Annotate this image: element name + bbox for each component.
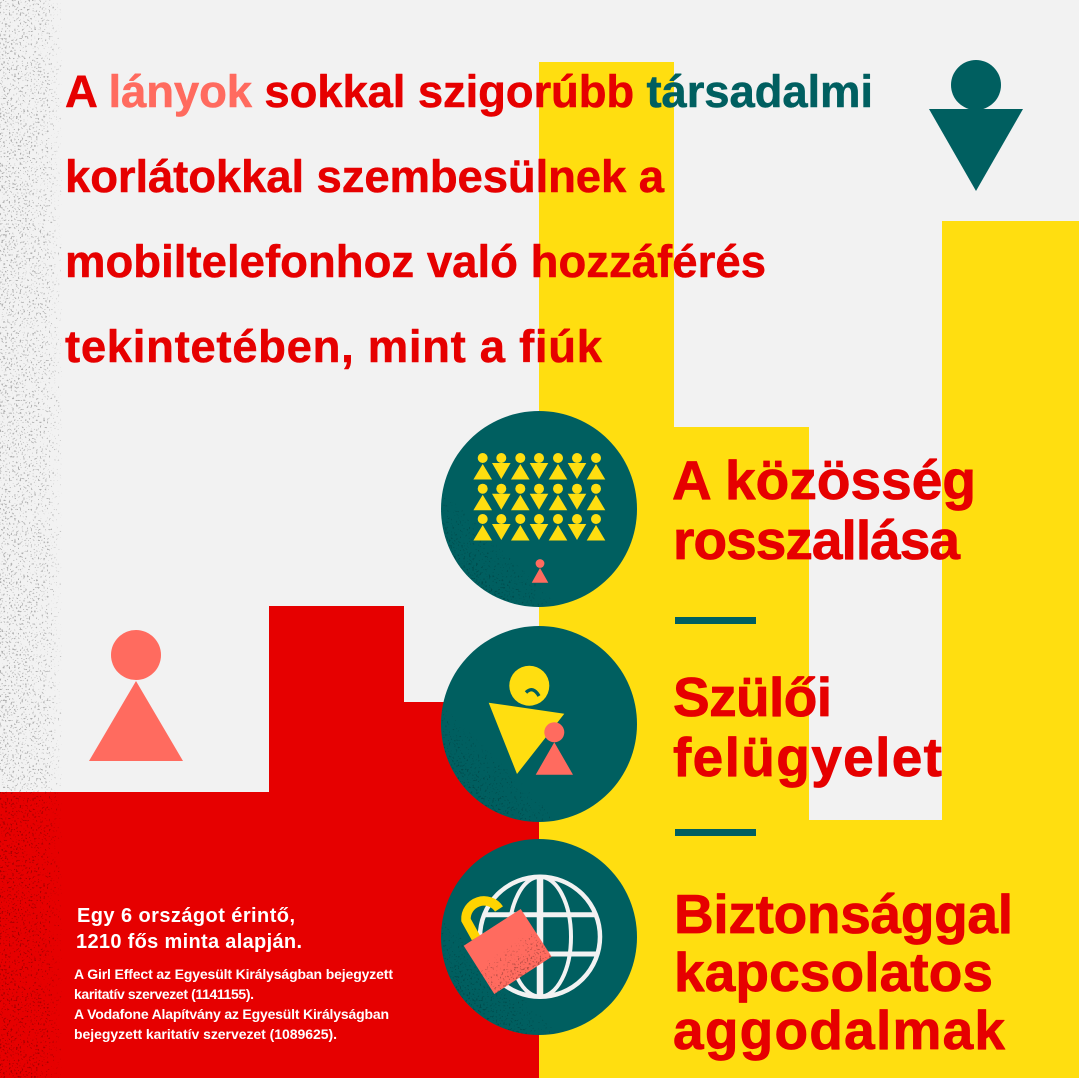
heading: parental supervision: Szülői bbox=[673, 666, 832, 728]
sample note bbox=[76, 905, 302, 953]
title: korlátokkal szembesülnek a bbox=[65, 151, 665, 202]
red stepped staircase bbox=[0, 606, 539, 1078]
icon: teal boy figure bbox=[929, 60, 1023, 191]
icon: community disapproval circle bbox=[441, 411, 637, 607]
icon: coral girl figure bbox=[89, 630, 183, 761]
heading: community disapproval bbox=[672, 449, 976, 571]
divider bbox=[675, 829, 756, 836]
charity registration note: bejegyzett karitatív szervezet (1089625). bbox=[74, 1026, 337, 1042]
heading: safety concerns: aggodalmak bbox=[673, 999, 1005, 1061]
divider bbox=[675, 617, 756, 624]
charity registration note: karitatív szervezet (1141155). bbox=[74, 986, 254, 1002]
icon: safety concerns circle with globe and padlock bbox=[441, 839, 637, 1035]
title: A lányok sokkal szigorúbb társadalmi bbox=[65, 66, 873, 117]
heading: parental supervision: felügyelet bbox=[673, 726, 942, 788]
heading: safety concerns bbox=[673, 883, 1013, 1061]
title: tekintetében, mint a fiúk bbox=[65, 321, 603, 372]
heading: safety concerns: Biztonsággal bbox=[674, 883, 1013, 945]
title bbox=[65, 66, 873, 372]
sample note: 1210 fős minta alapján. bbox=[76, 931, 302, 953]
charity registration note: A Vodafone Alapítvány az Egyesült Királyságban bbox=[74, 1006, 389, 1022]
title: mobiltelefonhoz való hozzáférés bbox=[65, 236, 766, 287]
heading: community disapproval: rosszallása bbox=[673, 509, 960, 571]
heading: safety concerns: kapcsolatos bbox=[674, 941, 993, 1003]
charity registration note bbox=[74, 966, 393, 1042]
icon: parental supervision circle bbox=[441, 626, 637, 822]
sample note: Egy 6 országot érintő, bbox=[77, 905, 295, 927]
heading: parental supervision bbox=[673, 666, 942, 788]
heading: community disapproval: A közösség bbox=[672, 449, 976, 511]
yellow stepped staircase bbox=[539, 62, 1079, 1078]
charity registration note: A Girl Effect az Egyesült Királyságban bejegyzett bbox=[74, 966, 393, 982]
